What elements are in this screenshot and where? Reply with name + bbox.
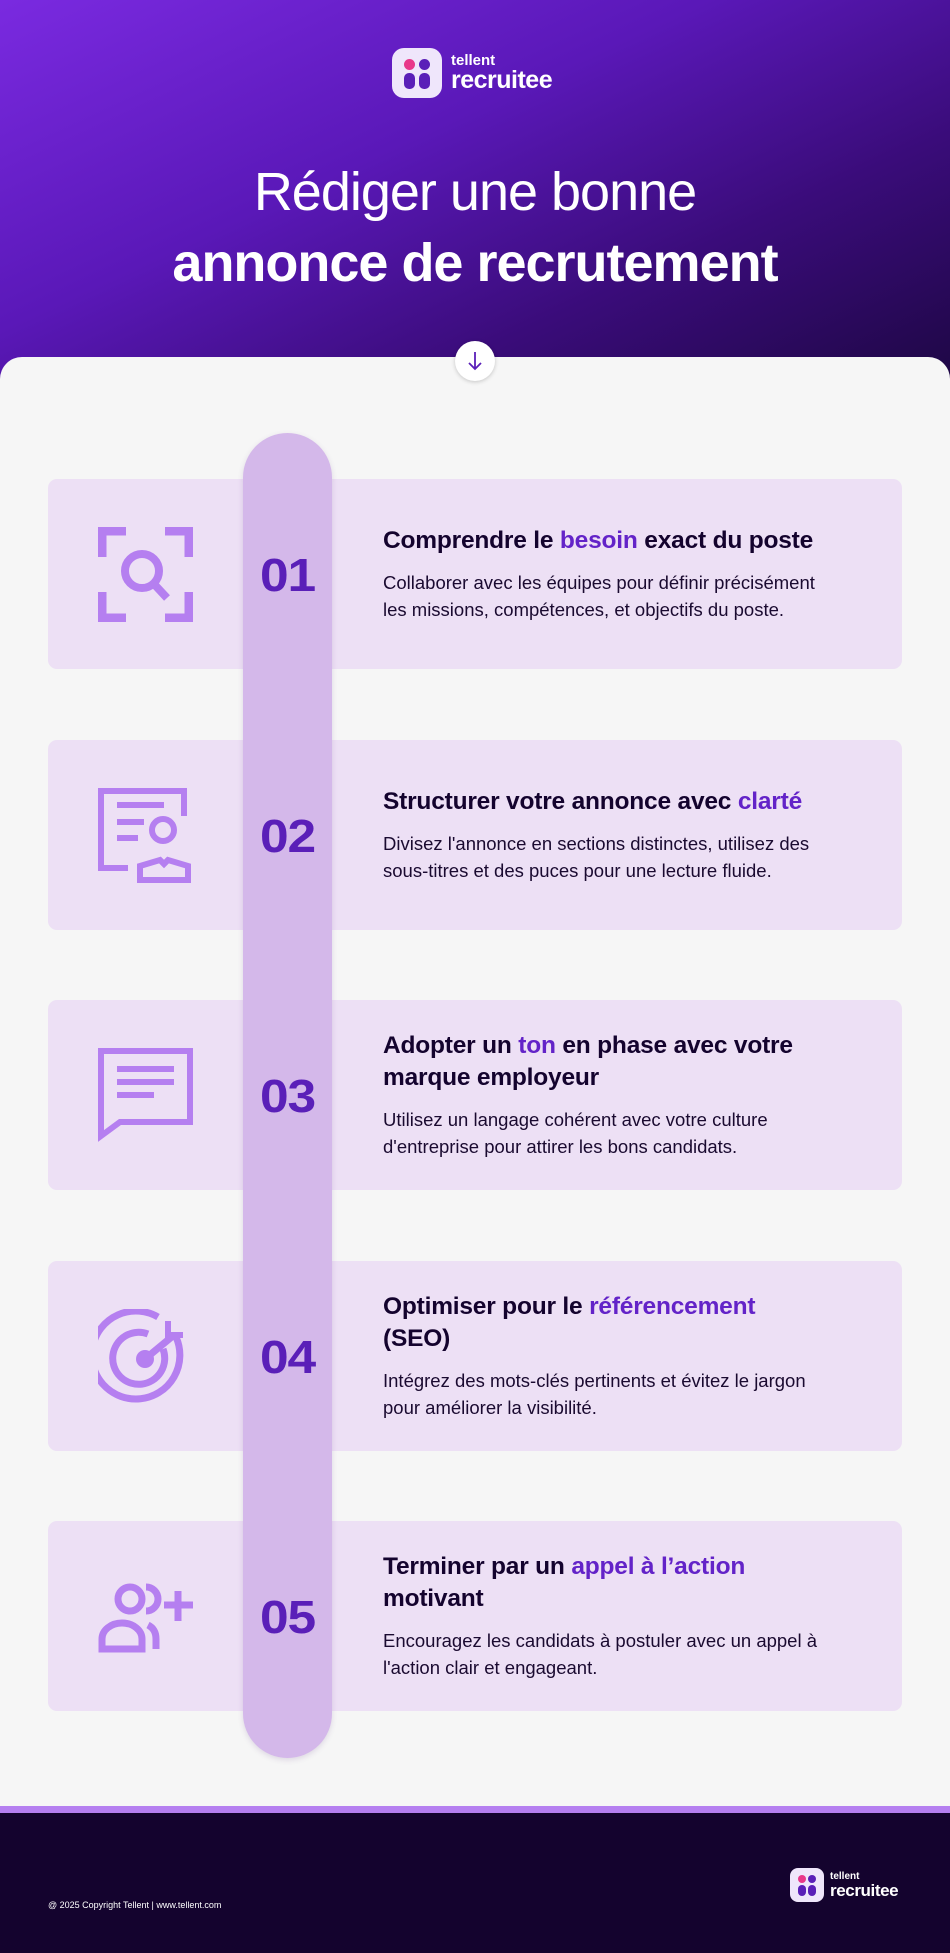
text 1 [383,527,815,620]
number 02: 02 [260,810,315,862]
text 5: motivant [383,1585,484,1612]
text 4 [383,1293,806,1418]
timeline pill [243,433,332,1758]
text 5: Terminer par un appel à l’action [383,1553,745,1580]
text 5 [383,1553,818,1678]
text 1: les missions, compétences, et objectifs du poste. [383,599,784,620]
card 1 [48,479,902,669]
card 4 [48,1261,902,1451]
text 3: marque employeur [383,1064,599,1091]
icon: document with person [98,788,191,883]
logo: top: recruitee [451,66,552,94]
text 4: Intégrez des mots-clés pertinents et évitez le jargon [383,1370,806,1391]
text 4: Optimiser pour le référencement [383,1293,755,1320]
text 3: d'entreprise pour attirer les bons candidats. [383,1136,737,1157]
logo: footer: tellent [830,1870,859,1882]
number 03: 03 [260,1070,315,1122]
card 3 [48,1000,902,1190]
card 5 [48,1521,902,1711]
text 3: Utilisez un langage cohérent avec votre culture [383,1109,768,1130]
icon: add user [98,1584,193,1652]
text 1: Comprendre le besoin exact du poste [383,527,813,554]
logo: footer: recruitee [830,1880,898,1900]
logo: footer [790,1868,898,1902]
number 04: 04 [260,1331,315,1383]
icon: chat bubble [98,1048,193,1142]
copyright text: @ 2025 Copyright Tellent | www.tellent.com [48,1900,221,1910]
number 05: 05 [260,1591,315,1643]
icon: scan search [98,527,193,622]
card 2 [48,740,902,930]
text 4: pour améliorer la visibilité. [383,1397,597,1418]
logo: top: tellent [451,52,495,69]
header background [0,0,950,380]
text 2: Divisez l'annonce en sections distinctes, utilisez des [383,833,809,854]
text 2 [383,788,809,881]
icon: target with arrow [98,1309,184,1402]
text 2: sous-titres et des puces pour une lecture fluide. [383,860,772,881]
content sheet [0,357,950,1817]
title [172,162,778,293]
text 1: Collaborer avec les équipes pour définir précisément [383,572,815,593]
logo: top [392,48,552,98]
text 5: Encouragez les candidats à postuler avec un appel à [383,1630,817,1651]
text 3: Adopter un ton en phase avec votre [383,1032,793,1059]
text 4: (SEO) [383,1325,450,1352]
title: annonce de recrutement [172,233,778,293]
text 5: l'action clair et engageant. [383,1657,597,1678]
text 3 [383,1032,793,1157]
number 01: 01 [260,549,315,601]
footer [0,1806,950,1953]
title: Rédiger une bonne [254,162,696,222]
text 2: Structurer votre annonce avec clarté [383,788,802,815]
icon: down arrow [455,341,495,381]
